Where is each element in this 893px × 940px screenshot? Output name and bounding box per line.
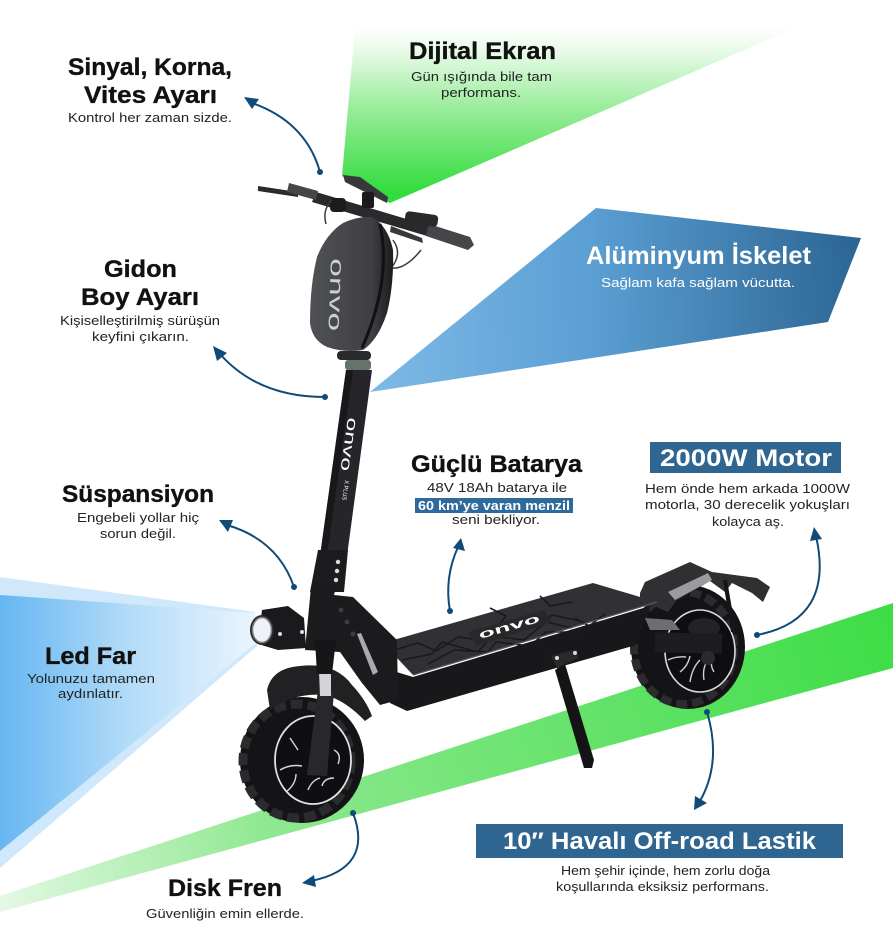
green light beam: digital display [342, 28, 795, 203]
callout: handlebar height: Gidon [104, 256, 177, 283]
callout: battery: seni bekliyor. [452, 513, 540, 527]
callout: motor: Hem önde hem arkada 1000W [645, 482, 850, 496]
range highlight [415, 498, 573, 513]
callout: motor: 2000W Motor [660, 445, 832, 472]
blue beam: led headlight outer glow [0, 577, 257, 868]
blue beam: led headlight core [0, 595, 256, 851]
callout: led headlight: Yolunuzu tamamen [27, 672, 155, 686]
callout: battery [411, 451, 583, 527]
callout: disc brake: Disk Fren [168, 875, 282, 902]
stem pole: X PLUS [340, 480, 349, 500]
handlebar and grips [258, 183, 474, 268]
callout: handlebar height: Boy Ayarı [81, 284, 199, 311]
callout: digital display [409, 38, 556, 100]
arrow: suspension [219, 520, 297, 590]
callout: disc brake: Güvenliğin emin ellerde. [146, 907, 304, 921]
callout: aluminium frame: Sağlam kafa sağlam vücutta. [601, 276, 795, 290]
callout: led headlight: aydınlatır. [58, 687, 123, 701]
callout: signal, horn, gear: Vites Ayarı [84, 82, 217, 109]
arrow: signal [244, 97, 323, 175]
arrow: disc brake [302, 810, 358, 887]
deck logo: onvo [477, 611, 541, 642]
callout: aluminium frame [586, 242, 812, 290]
green ground stripe [0, 603, 893, 912]
kickstand [551, 649, 594, 768]
callout: led headlight [27, 643, 155, 701]
motor heading box [650, 442, 841, 473]
callout: handlebar height: keyfini çıkarın. [92, 330, 189, 344]
callout: disc brake [146, 875, 304, 921]
blue beam: aluminium frame [370, 208, 861, 392]
callout: tyre: Hem şehir içinde, hem zorlu doğa [561, 864, 770, 878]
callout: suspension: Engebeli yollar hiç [77, 511, 199, 525]
folding joint and fork head [305, 587, 398, 705]
front fender and fork [267, 640, 372, 776]
callout: suspension: Süspansiyon [62, 481, 214, 508]
callout: signal, horn, gear [68, 54, 232, 125]
callout: battery: 48V 18Ah batarya ile [427, 481, 567, 495]
rear wheel [631, 585, 745, 709]
pole logo: onvo [337, 416, 361, 472]
callout: tyre: 10″ Havalı Off-road Lastik [503, 828, 817, 855]
callout: motor: motorla, 30 derecelik yokuşları [645, 498, 850, 512]
handlebar bag [310, 217, 393, 351]
callout: handlebar height [60, 256, 220, 344]
digital display [343, 175, 388, 208]
led headlight [250, 606, 306, 650]
arrow: battery [447, 538, 465, 614]
callout: digital display: Dijital Ekran [409, 38, 556, 65]
callout: signal, horn, gear: Kontrol her zaman sizde. [68, 111, 232, 125]
callout: led headlight: Led Far [45, 643, 136, 670]
arrow: tyre [694, 709, 713, 810]
deck and battery body [377, 583, 657, 711]
callout: motor: kolayca aş. [712, 515, 784, 529]
callout: tyre: koşullarında eksiksiz performans. [556, 880, 769, 894]
stem pole [310, 351, 372, 592]
rear tail light [645, 618, 680, 630]
tyre heading box [476, 824, 843, 858]
callout: aluminium frame: Alüminyum İskelet [586, 242, 812, 270]
front wheel [240, 697, 364, 823]
arrow: handlebar height [213, 346, 328, 400]
callout: tyre [476, 824, 843, 894]
callout: signal, horn, gear: Sinyal, Korna, [68, 54, 232, 81]
callout: handlebar height: Kişiselleştirilmiş sürüşün [60, 314, 220, 328]
bag logo: onvo [323, 258, 347, 332]
callout: digital display: performans. [441, 86, 521, 100]
callout: battery: 60 km’ye varan menzil [418, 499, 570, 513]
callout: suspension: sorun değil. [100, 527, 176, 541]
arrow: motor [754, 527, 822, 638]
scooter illustration [240, 175, 770, 823]
callout: suspension [62, 481, 214, 541]
callout: motor [645, 442, 850, 529]
rear fender [640, 562, 770, 632]
callout: battery: Güçlü Batarya [411, 451, 583, 478]
callout: digital display: Gün ışığında bile tam [411, 70, 552, 84]
